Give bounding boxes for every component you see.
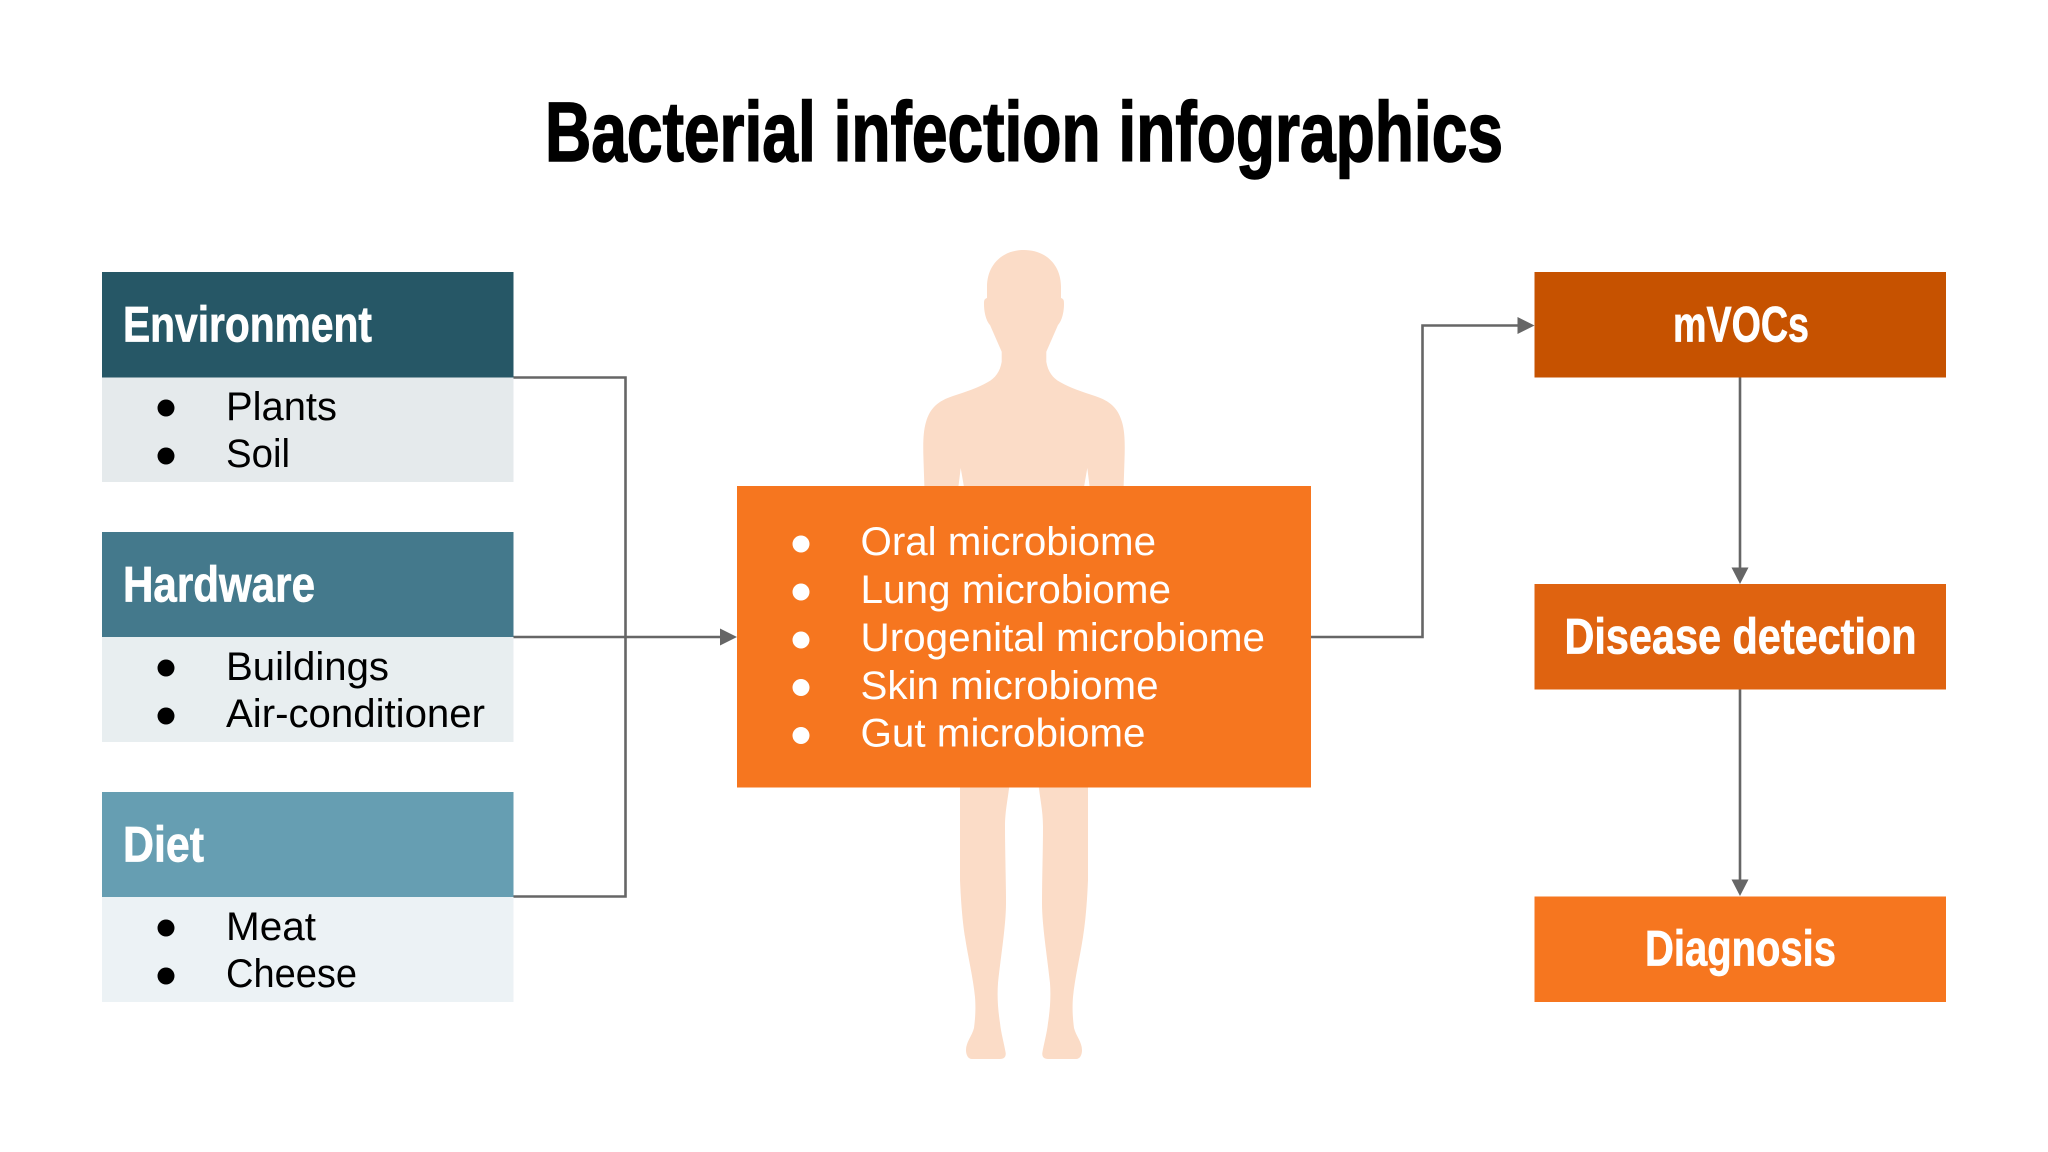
- diet heading bar: [102, 792, 514, 897]
- title: Bacterial infection infographics: [545, 85, 1503, 179]
- outcome: disease detection: Disease detection: [1564, 608, 1916, 664]
- silhouette: head and torso: [923, 250, 1125, 490]
- microbiome list: Skin microbiome: [860, 664, 1158, 708]
- outcome: diagnosis: [1534, 896, 1946, 1002]
- microbiome list: Lung microbiome: [860, 568, 1171, 612]
- environment list: [158, 385, 337, 476]
- panel: hardware: [102, 532, 514, 742]
- connector lines: left group to centre: [513, 378, 722, 896]
- hardware list: [158, 645, 485, 736]
- hardware list: Buildings: [226, 645, 389, 689]
- environment heading: Environment: [123, 296, 372, 352]
- diet list background: [102, 897, 514, 1002]
- connector: disease detection to diagnosis: [1739, 690, 1741, 882]
- outcome: disease detection: [1534, 584, 1946, 690]
- environment heading bar: [102, 272, 514, 378]
- microbiome list: Urogenital microbiome: [860, 616, 1265, 660]
- microbiome list: Gut microbiome: [860, 712, 1146, 756]
- hardware heading bar: [102, 532, 514, 637]
- arrow: sources into microbiome box: [720, 628, 737, 646]
- diet list: [158, 905, 357, 996]
- hardware heading: Hardware: [123, 556, 315, 612]
- arrow: into mVOCs: [1518, 317, 1534, 334]
- outcome: mVOCs: [1534, 272, 1946, 378]
- environment list: Soil: [226, 432, 290, 476]
- panel: environment: [102, 272, 514, 482]
- panel: microbiome: [737, 486, 1311, 788]
- connector: mVOCs to disease detection: [1739, 378, 1741, 570]
- diet list: Meat: [226, 905, 316, 949]
- panel: diet: [102, 792, 514, 1002]
- outcome: diagnosis: Diagnosis: [1645, 920, 1836, 976]
- arrow: into disease detection: [1732, 568, 1748, 584]
- microbiome box: [737, 486, 1311, 788]
- arrow: into diagnosis: [1732, 880, 1748, 896]
- silhouette: right leg: [1038, 780, 1088, 1059]
- environment list: Plants: [226, 385, 337, 429]
- silhouette: left leg: [960, 780, 1010, 1059]
- diet list: Cheese: [226, 952, 357, 996]
- outcome: mVOCs: mVOCs: [1673, 296, 1809, 352]
- environment list background: [102, 378, 514, 482]
- hardware list: Air-conditioner: [226, 692, 485, 736]
- microbiome list: Oral microbiome: [860, 520, 1156, 564]
- hardware list background: [102, 637, 514, 742]
- diet heading: Diet: [123, 816, 204, 872]
- human body silhouette: [923, 250, 1125, 1059]
- connector: microbiome box to mVOCs: [1311, 326, 1520, 637]
- microbiome list: [792, 520, 1265, 756]
